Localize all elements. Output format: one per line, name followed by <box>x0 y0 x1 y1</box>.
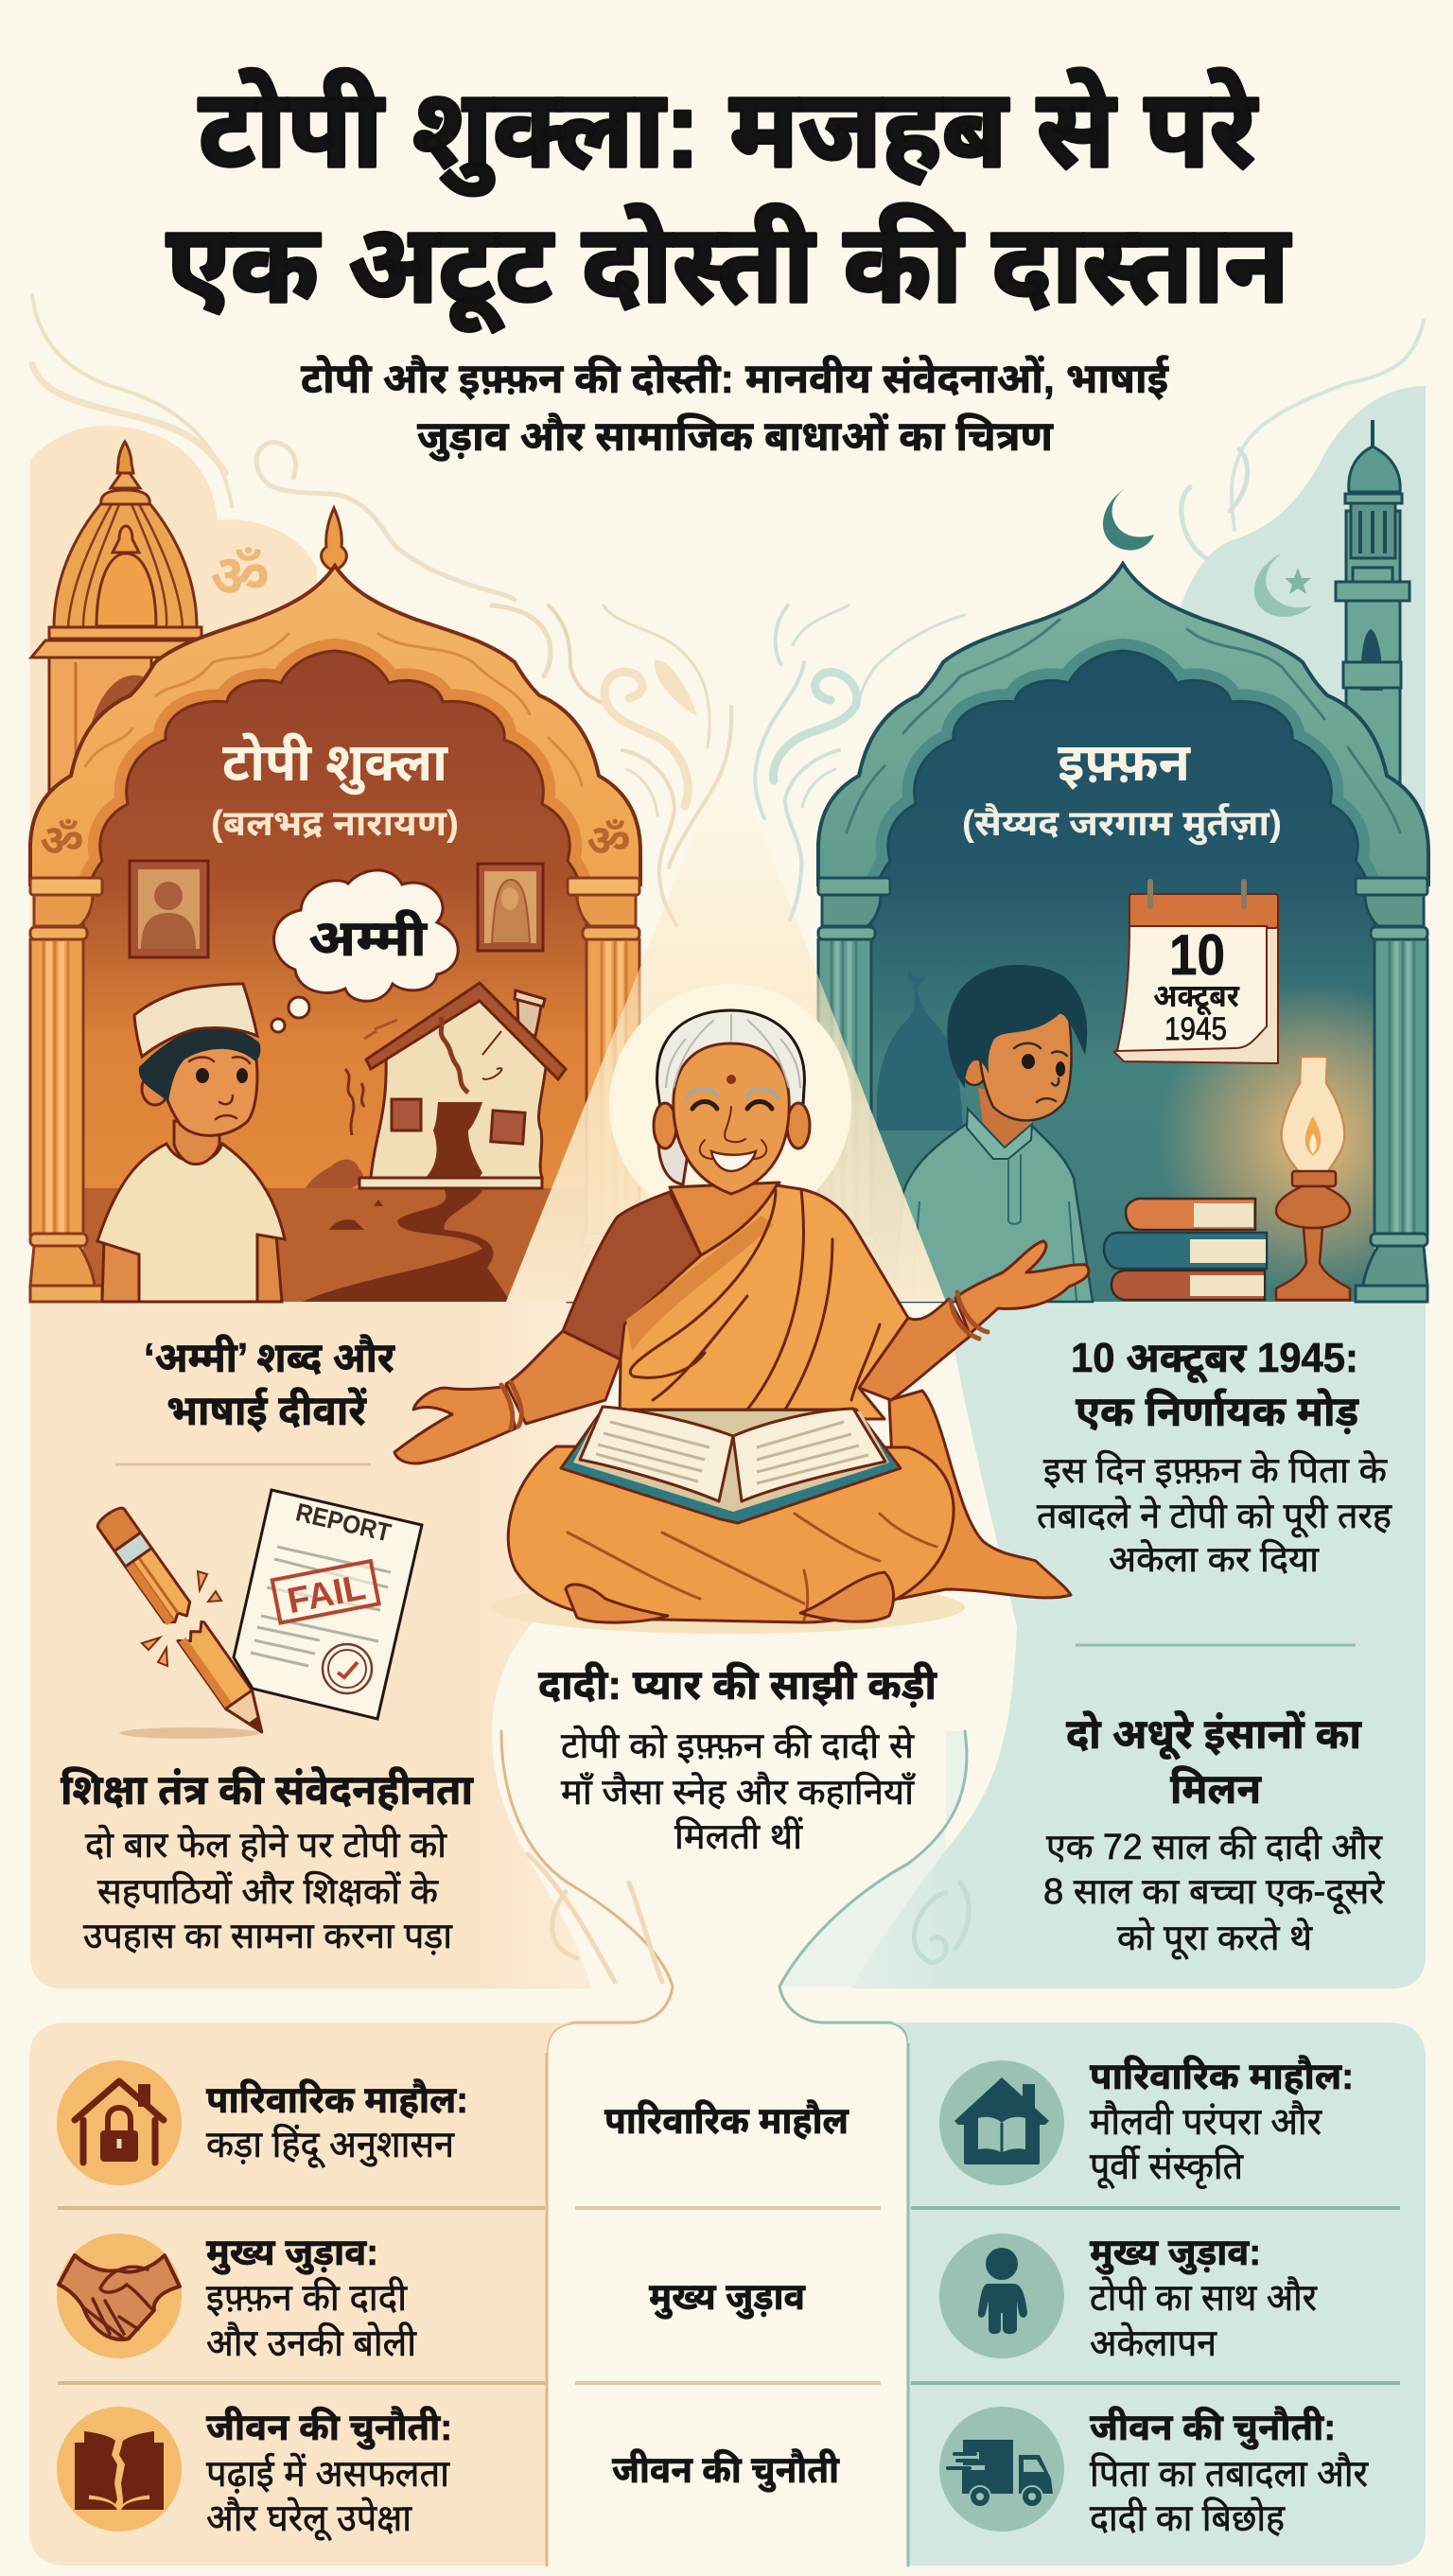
thought bubble <box>271 870 458 1032</box>
neck <box>174 1121 219 1165</box>
brows and mouth <box>189 1057 250 1119</box>
ground <box>83 1188 586 1302</box>
cap <box>134 984 257 1057</box>
shirt <box>97 1144 285 1302</box>
text block: dadi: टोपी को इफ़्फ़न की दादी से <box>561 1725 915 1766</box>
icon: house with lock <box>57 2060 182 2185</box>
boy Topi with cap <box>97 984 285 1302</box>
comparison table <box>29 2023 1426 2566</box>
smile <box>711 1151 756 1171</box>
icon: moving truck <box>939 2407 1064 2532</box>
shards <box>142 1571 221 1666</box>
row 3 left text: जीवन की चुनौती: <box>206 2407 452 2450</box>
right arm <box>859 1299 970 1400</box>
icon: child <box>939 2234 1064 2358</box>
blouse <box>563 1192 701 1359</box>
ears <box>654 1103 676 1148</box>
row 2 right text: मुख्य जुड़ाव: <box>1090 2233 1261 2275</box>
text block: two incomplete people <box>1043 1709 1385 1960</box>
calendar: अक्टूबर <box>1153 978 1240 1016</box>
text block: education: सहपाठियों और शिक्षकों के <box>97 1870 439 1912</box>
subtitle <box>301 354 1169 462</box>
arch ornament swirls <box>847 620 1400 832</box>
text block: two incomplete people: मिलन <box>1170 1765 1262 1813</box>
row 1 right text: पूर्वी संस्कृति <box>1090 2146 1244 2189</box>
row 3 right text: दादी का बिछोह <box>1090 2497 1286 2539</box>
pencil upper half <box>126 1548 195 1628</box>
row 2 left text: मुख्य जुड़ाव: <box>206 2233 378 2275</box>
left panel: peach background <box>30 1302 605 1989</box>
pencil broken <box>95 1505 275 1742</box>
kurta <box>893 1123 1093 1302</box>
arch inner outline <box>871 651 1374 946</box>
hair <box>139 1025 260 1102</box>
text block: two incomplete people: दो अधूरे इंसानों का <box>1066 1709 1362 1761</box>
text block: two incomplete people: 8 साल का बच्चा एक-दूसरे <box>1043 1870 1385 1915</box>
left hand <box>394 1387 516 1463</box>
nose and cheeks <box>700 1107 766 1159</box>
neck <box>978 1088 1041 1147</box>
right arch <box>818 564 1453 1306</box>
neck <box>670 1183 779 1255</box>
row 3 right text <box>1090 2407 1369 2539</box>
arch frame <box>818 564 1428 885</box>
text block: 10 October 1945: एक निर्णायक मोड़ <box>1076 1388 1359 1435</box>
floor shadow <box>492 1581 965 1634</box>
light beam from grandmother <box>506 747 946 1343</box>
book cover <box>561 1410 901 1523</box>
right foot <box>800 1572 894 1621</box>
left foot <box>566 1585 668 1622</box>
icon: torn book <box>57 2407 182 2532</box>
row 1 right text <box>1090 2056 1354 2189</box>
text block: two incomplete people: एक 72 साल की दादी और <box>1046 1826 1383 1867</box>
row 2 right text <box>1090 2233 1318 2364</box>
name heading: Topi Shukla <box>211 732 459 844</box>
report card <box>234 1490 422 1719</box>
text block: dadi: दादी: प्यार की साझी कड़ी <box>538 1661 937 1709</box>
table centre column border left <box>545 2053 549 2566</box>
text block: education: उपहास का सामना करना पड़ा <box>83 1917 453 1956</box>
mosque silhouette <box>877 969 963 1130</box>
ferrule <box>114 1533 151 1567</box>
text block: ammi: भाषाई दीवारें <box>166 1387 368 1434</box>
om right: ॐ <box>586 815 631 865</box>
closed eyes <box>692 1101 772 1109</box>
row 1 centre label: पारिवारिक माहौल <box>604 2100 849 2142</box>
row 2 left text <box>206 2233 417 2364</box>
arch inner scene <box>871 653 1374 1302</box>
sari sash border <box>626 1216 774 1351</box>
temple tower <box>31 442 201 946</box>
left arm <box>506 1331 621 1424</box>
hair <box>947 965 1087 1088</box>
row 3 right text: पिता का तबादला और <box>1090 2453 1369 2495</box>
oil lamp <box>1276 1057 1350 1300</box>
book pages <box>573 1411 889 1512</box>
om symbol faint: ॐ <box>210 544 271 609</box>
text block: 10 October 1945: तबादले ने टोपी को पूरी तरह <box>1037 1495 1392 1538</box>
eyebrows <box>687 1089 778 1097</box>
text block: ammi: ‘अम्मी’ शब्द और <box>144 1334 395 1381</box>
row 2 right text: अकेलापन <box>1090 2322 1217 2364</box>
row 2 right text: टोपी का साथ और <box>1090 2277 1318 2319</box>
sari tail <box>889 1391 1071 1599</box>
right hand <box>955 1241 1089 1334</box>
section divider left <box>115 1463 371 1466</box>
arch ornament swirls <box>85 634 582 785</box>
text block: two incomplete people: को पूरा करते थे <box>1117 1917 1313 1960</box>
hair strands <box>666 1014 800 1088</box>
bindi <box>726 1075 736 1084</box>
row 2 left text: इफ़्फ़न की दादी <box>206 2277 408 2319</box>
name heading: Topi Shukla: टोपी शुक्ला <box>222 732 448 796</box>
fail stamp: FAIL <box>284 1568 369 1621</box>
text block: education: दो बार फेल होने पर टोपी को <box>85 1824 447 1866</box>
text block: dadi <box>538 1661 937 1857</box>
arch frame <box>30 566 640 885</box>
row 1 left text: पारिवारिक माहौल: <box>206 2079 468 2121</box>
fail stamp <box>272 1561 379 1623</box>
row 2 left text: और उनकी बोली <box>206 2322 417 2364</box>
subtitle: जुड़ाव और सामाजिक बाधाओं का चित्रण <box>417 412 1055 462</box>
pale mint band beside swirl <box>779 1731 967 1987</box>
subtitle: टोपी और इफ़्फ़न की दोस्ती: मानवीय संवेदनाओं, भाषाई <box>301 354 1169 402</box>
right pillar <box>568 878 639 1302</box>
name heading: Iffan <box>962 732 1282 846</box>
icon: handshake <box>57 2234 182 2358</box>
halo <box>609 984 851 1226</box>
hair back <box>658 1135 691 1184</box>
boy Iffan <box>893 965 1093 1302</box>
ear <box>961 1049 988 1085</box>
calendar: 1945 <box>1164 1011 1227 1047</box>
report heading: REPORT <box>293 1498 394 1548</box>
left pillar <box>30 878 102 1302</box>
icon: house with book <box>939 2060 1064 2185</box>
eyes <box>196 1068 209 1083</box>
arch inner trim <box>83 651 586 946</box>
table centre column border right <box>906 2043 910 2566</box>
cracked house <box>306 983 566 1230</box>
face <box>979 1009 1072 1120</box>
text block: dadi: माँ जैसा स्नेह और कहानियाँ <box>561 1771 916 1813</box>
name heading: Iffan: (सैय्यद जरगाम मुर्तज़ा) <box>962 802 1282 846</box>
row 3 centre label: जीवन की चुनौती <box>612 2449 840 2493</box>
portrait frame: man <box>130 861 208 957</box>
minaret <box>1336 420 1409 946</box>
row 3 left text <box>206 2407 452 2541</box>
arch inner trim <box>871 651 1374 946</box>
brows and mouth <box>1014 1043 1067 1102</box>
leg folds <box>568 1514 937 1620</box>
text block: education <box>61 1765 474 1956</box>
text block: education: शिक्षा तंत्र की संवेदनहीनता <box>61 1765 474 1814</box>
name heading: Iffan: इफ़्फ़न <box>1058 732 1192 792</box>
thought bubble: अम्मी <box>308 909 428 967</box>
pencil shadow <box>119 1727 259 1739</box>
title <box>166 67 1292 333</box>
calendar: 10 <box>1169 923 1225 987</box>
text block: 10 October 1945 <box>1037 1335 1392 1580</box>
hair <box>657 1010 804 1121</box>
title: एक अटूट दोस्ती की दास्तान <box>166 202 1292 333</box>
pencil tip <box>226 1691 275 1742</box>
mosque background blob <box>1173 386 1426 946</box>
face <box>674 1043 789 1194</box>
text block: 10 October 1945: इस दिन इफ़्फ़न के पिता के <box>1043 1449 1388 1491</box>
row 3 left text: और घरेलू उपेक्षा <box>206 2497 412 2541</box>
text block: ammi <box>144 1334 395 1434</box>
eyes <box>1022 1054 1035 1069</box>
right pillar <box>1356 878 1427 1302</box>
arch inner outline <box>83 651 586 946</box>
face <box>161 1039 257 1135</box>
row 1 left text <box>206 2079 468 2168</box>
lamp glow <box>1164 990 1374 1285</box>
sari folds <box>630 1190 880 1410</box>
row 3 right text: जीवन की चुनौती: <box>1090 2407 1336 2450</box>
seal with tick <box>323 1644 372 1693</box>
right panel: mint background <box>851 1302 1426 1989</box>
sari upper <box>620 1185 908 1419</box>
row 3 left text: पढ़ाई में असफलता <box>206 2453 450 2495</box>
arms <box>102 1235 282 1302</box>
title: टोपी शुक्ला: मजहब से परे <box>199 67 1258 197</box>
stack of books <box>1104 1199 1267 1300</box>
right bangles <box>951 1292 988 1339</box>
crossed legs <box>508 1446 954 1622</box>
temple background blob <box>30 426 331 946</box>
name heading: Topi Shukla: (बलभद्र नारायण) <box>211 804 459 844</box>
decorative swirls: top <box>32 295 1424 925</box>
row 1 right text: मौलवी परंपरा और <box>1090 2101 1322 2143</box>
row 1 right text: पारिवारिक माहौल: <box>1090 2056 1354 2097</box>
section divider right <box>1076 1644 1356 1646</box>
table left column <box>29 2023 575 2566</box>
text block: 10 October 1945: 10 अक्टूबर 1945: <box>1071 1335 1358 1384</box>
table row dividers <box>58 2208 545 2383</box>
om left: ॐ <box>40 815 84 865</box>
collar and placket <box>967 1109 1032 1159</box>
crescent and star light <box>1254 553 1312 617</box>
calendar <box>1114 882 1278 1063</box>
ear <box>142 1073 168 1105</box>
left arch <box>30 508 640 1306</box>
text block: dadi: मिलती थीं <box>674 1815 803 1857</box>
pencil lower half <box>177 1621 275 1742</box>
portrait frame: woman <box>478 864 543 951</box>
left bangles <box>501 1382 521 1428</box>
center swirl lines <box>501 1731 969 2566</box>
grandmother figure <box>394 1010 1089 1634</box>
row 2 centre label: मुख्य जुड़ाव <box>649 2277 806 2320</box>
report lines <box>251 1547 391 1666</box>
arch inner scene <box>76 643 596 1306</box>
left pillar <box>818 878 890 1302</box>
text block: 10 October 1945: अकेला कर दिया <box>1109 1538 1320 1580</box>
row 1 left text: कड़ा हिंदू अनुशासन <box>206 2124 455 2168</box>
table right column <box>890 2023 1426 2566</box>
crescent moon dark <box>1103 488 1154 551</box>
arch finial <box>322 508 346 571</box>
eraser <box>95 1505 141 1551</box>
book text lines <box>596 1422 868 1483</box>
